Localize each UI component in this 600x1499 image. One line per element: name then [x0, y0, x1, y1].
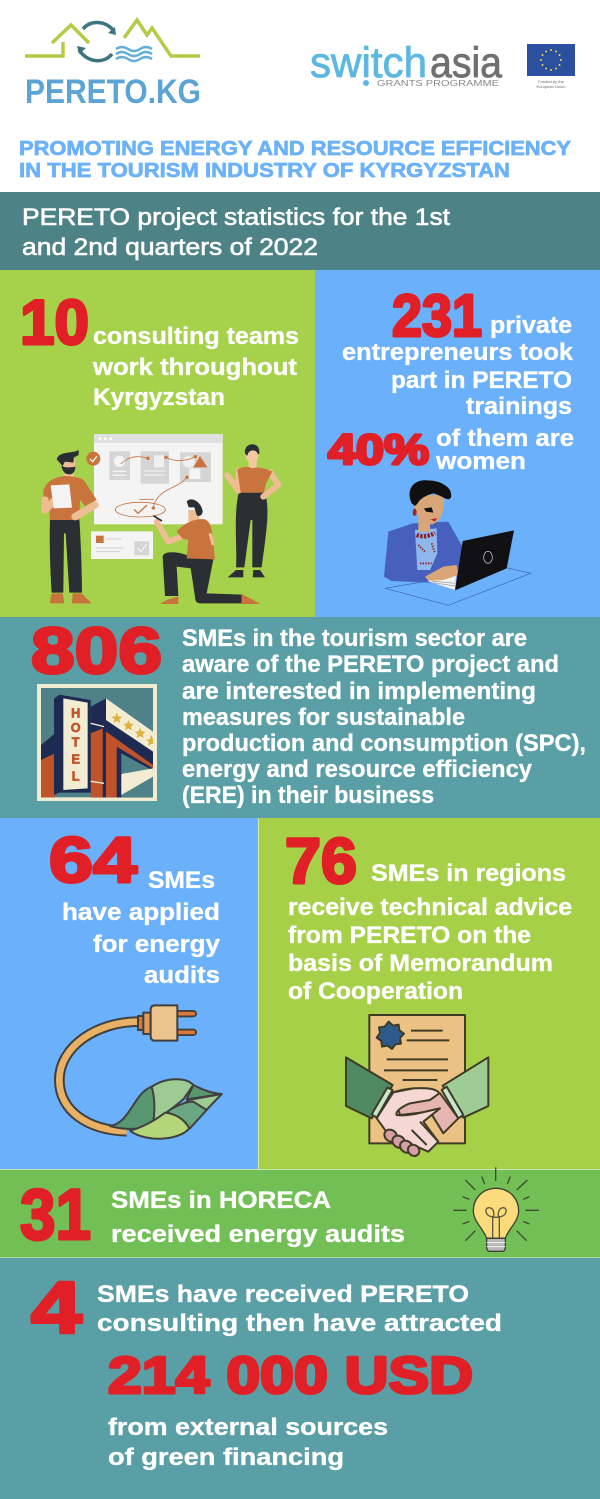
text block: green financing: [108, 1414, 388, 1471]
stat: 76 SMEs in regions: basis of Memorandum: [288, 950, 553, 977]
icon: hotel: E: [71, 752, 80, 766]
icon: light bulb: [453, 1167, 539, 1251]
text block: SMEs aware description: energy and resource efficiency: [182, 756, 533, 783]
illustration: woman with laptop: [384, 480, 531, 605]
panel: subtitle banner: [0, 192, 600, 270]
icon: hotel: L: [72, 770, 80, 784]
text block: SMEs aware description: are interested in implementing: [182, 678, 536, 705]
panel: SMEs aware: [0, 614, 600, 818]
panel: green financing: [0, 1258, 600, 1499]
stat: 40% women: [328, 425, 574, 475]
stat: 76 SMEs in regions: 76: [285, 825, 357, 897]
icon: EU flag: [527, 44, 575, 89]
stat: 10 consulting teams: Kyrgyzstan: [93, 384, 225, 411]
panel: consulting teams: [0, 270, 315, 617]
stat: 40% women: of them are: [436, 425, 574, 452]
icon: EU flag: Funded by the: [538, 79, 565, 84]
stat: 64 SMEs applied: SMEs: [148, 867, 215, 894]
stat: 4 SMEs: SMEs have received PERETO: [97, 1281, 469, 1308]
text block: green financing: from external sources: [108, 1414, 388, 1441]
panel: technical advice: [258, 818, 600, 1169]
text block: green financing: of green financing: [108, 1444, 344, 1471]
panel: subtitle banner: PERETO project statistics for the 1st: [22, 204, 450, 231]
kneeling man: [163, 552, 242, 603]
stat: 10 consulting teams: work throughout: [92, 354, 297, 381]
icon: hotel: O: [71, 721, 81, 735]
stat: 40% women: women: [435, 448, 526, 475]
stat: 231 private entrepreneurs: 231: [392, 283, 482, 349]
text block: HORECA audits: SMEs in HORECA: [111, 1187, 331, 1214]
title: [19, 137, 571, 182]
illustration: team at whiteboard: [43, 434, 278, 604]
stat: 806: 806: [31, 614, 162, 687]
icon: hotel: [37, 684, 157, 801]
stat: 231 private entrepreneurs: private: [490, 312, 572, 339]
text block: HORECA audits: received energy audits: [111, 1221, 405, 1248]
stat: 64 SMEs applied: audits: [144, 962, 220, 989]
panel: HORECA audits: [0, 1167, 600, 1258]
stat: 40% women: 40%: [328, 426, 429, 474]
right woman: [236, 493, 267, 567]
stat: 31: 31: [20, 1176, 91, 1255]
left man: [50, 518, 82, 593]
stat: 231 private entrepreneurs: part in PERETO: [391, 367, 572, 394]
text block: SMEs aware description: aware of the PERETO project and: [182, 651, 559, 678]
stat: 64 SMEs applied: 64: [49, 824, 138, 896]
text block: SMEs aware description: production and consumption (SPC),: [182, 730, 586, 757]
logo: PERETO.KG: PERETO.KG: [25, 73, 201, 111]
icon: handshake and document: [346, 1015, 488, 1158]
logo: switch asia: asia: [430, 39, 502, 87]
text block: SMEs aware description: (ERE) in their business: [182, 782, 434, 809]
stat: 10 consulting teams: 10: [20, 288, 89, 358]
stat: 64 SMEs applied: have applied: [62, 899, 220, 926]
text block: HORECA audits: [111, 1187, 405, 1248]
stat: 64 SMEs applied: for energy: [93, 931, 221, 958]
icon: EU flag: European Union: [537, 84, 565, 89]
logo: switch asia: GRANTS PROGRAMME: [377, 78, 499, 88]
stat: 76 SMEs in regions: receive technical advice: [288, 894, 572, 921]
title: IN THE TOURISM INDUSTRY OF KYRGYZSTAN: [19, 159, 510, 182]
text block: SMEs aware description: measures for sustainable: [182, 704, 465, 731]
title: PROMOTING ENERGY AND RESOURCE EFFICIENCY: [19, 137, 571, 160]
icon: plug and leaf: [59, 1005, 222, 1139]
panel: entrepreneurs trained: [315, 270, 600, 617]
logo: PERETO.KG: [25, 20, 201, 111]
stat: 231 private entrepreneurs: trainings: [466, 393, 572, 420]
icon: hotel: T: [72, 736, 80, 750]
stat: 76 SMEs in regions: [285, 825, 572, 1005]
panel: subtitle banner: and 2nd quarters of 2022: [22, 234, 318, 261]
stat: 64 SMEs applied: [49, 824, 221, 989]
stat: 76 SMEs in regions: of Cooperation: [288, 978, 463, 1005]
stat: 76 SMEs in regions: SMEs in regions: [371, 860, 566, 887]
text block: SMEs aware description: SMEs in the tourism sector are: [182, 625, 527, 652]
icon: hotel: H: [71, 706, 80, 720]
stat: 4 SMEs: [31, 1268, 502, 1349]
stat: 4 SMEs: consulting then have attracted: [97, 1310, 502, 1337]
stat: 10 consulting teams: consulting teams: [93, 323, 299, 350]
stat: 76 SMEs in regions: from PERETO on the: [288, 922, 531, 949]
stat: 231 private entrepreneurs: entrepreneurs took: [342, 339, 574, 366]
text block: SMEs aware description: [182, 625, 586, 809]
panel: energy audit applications: [0, 818, 258, 1169]
logo: switch asia: [310, 39, 502, 88]
logo: switch asia: switch: [310, 39, 427, 87]
stat: 4 SMEs: 4: [31, 1268, 82, 1349]
stat: 214 000 USD: 214 000 USD: [108, 1347, 473, 1405]
stat: 231 private entrepreneurs: [342, 283, 574, 420]
stat: 10 consulting teams: [20, 288, 299, 411]
